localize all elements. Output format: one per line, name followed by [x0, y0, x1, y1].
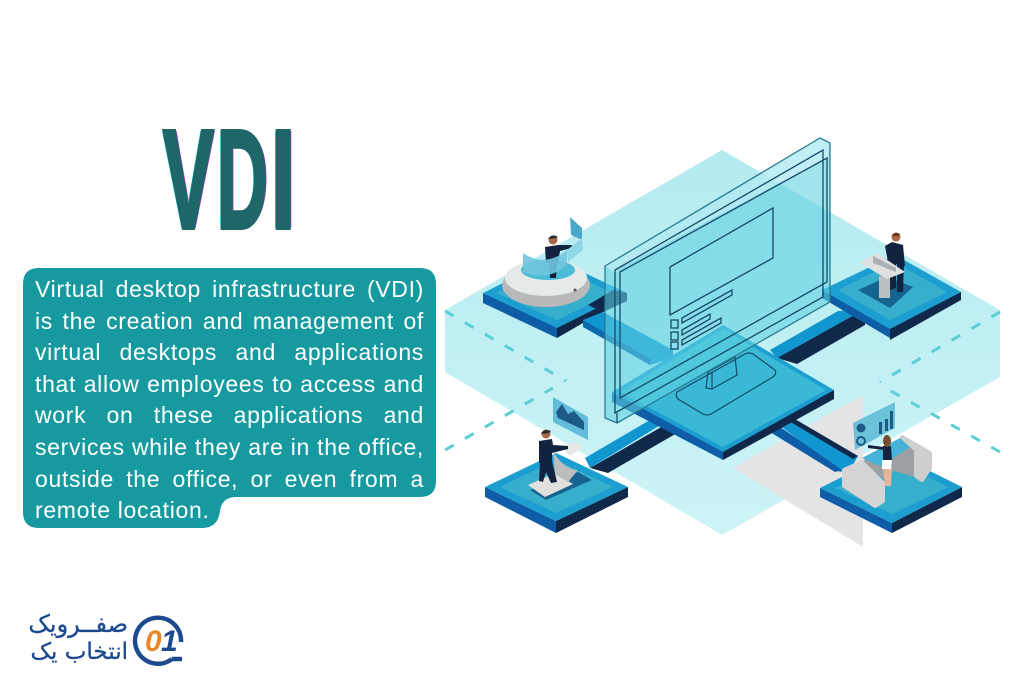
central platform [612, 325, 834, 460]
monitor stand [676, 353, 776, 415]
panel: description: services while they are in the office, [35, 434, 424, 460]
person: podium top right [860, 232, 905, 298]
title [162, 100, 295, 258]
logo [28, 610, 184, 666]
title: I [271, 100, 295, 258]
connector: bottom right [770, 414, 858, 472]
panel: description: outside the office, or even from a [35, 466, 424, 492]
monitor glass screen [605, 138, 830, 423]
logo: انتخاب یک [30, 639, 128, 665]
platform: top left [483, 258, 627, 338]
logo: 1 [161, 625, 178, 658]
panel: description: that allow employees to access and [35, 371, 424, 397]
background isometric floor [445, 150, 1000, 535]
panel: description: is the creation and management of [35, 308, 424, 334]
title: D [217, 100, 268, 258]
panel: description [23, 268, 436, 528]
connector: top right [770, 309, 865, 364]
platform: bottom left [485, 453, 628, 533]
logo: 0 [145, 625, 162, 658]
grey floor shadow [733, 395, 863, 547]
connector: bottom left [585, 415, 677, 473]
panel: description: remote location. [35, 497, 210, 523]
person: holographic stand bottom left [528, 397, 588, 497]
connector: top left [583, 305, 673, 365]
person: circular desk top left [502, 217, 590, 307]
title: V [163, 100, 214, 258]
logo: صفــرویک [28, 610, 128, 638]
panel: description: work on these applications and [35, 402, 424, 428]
panel: description: Virtual desktop infrastructure (VDI) [35, 276, 424, 302]
dashed arrows [445, 311, 1000, 452]
platform: top right [822, 255, 961, 340]
panel: description: virtual desktops and applications [35, 339, 424, 365]
person: sofa and hologram bottom right [844, 402, 930, 506]
platform: bottom right [820, 452, 962, 533]
